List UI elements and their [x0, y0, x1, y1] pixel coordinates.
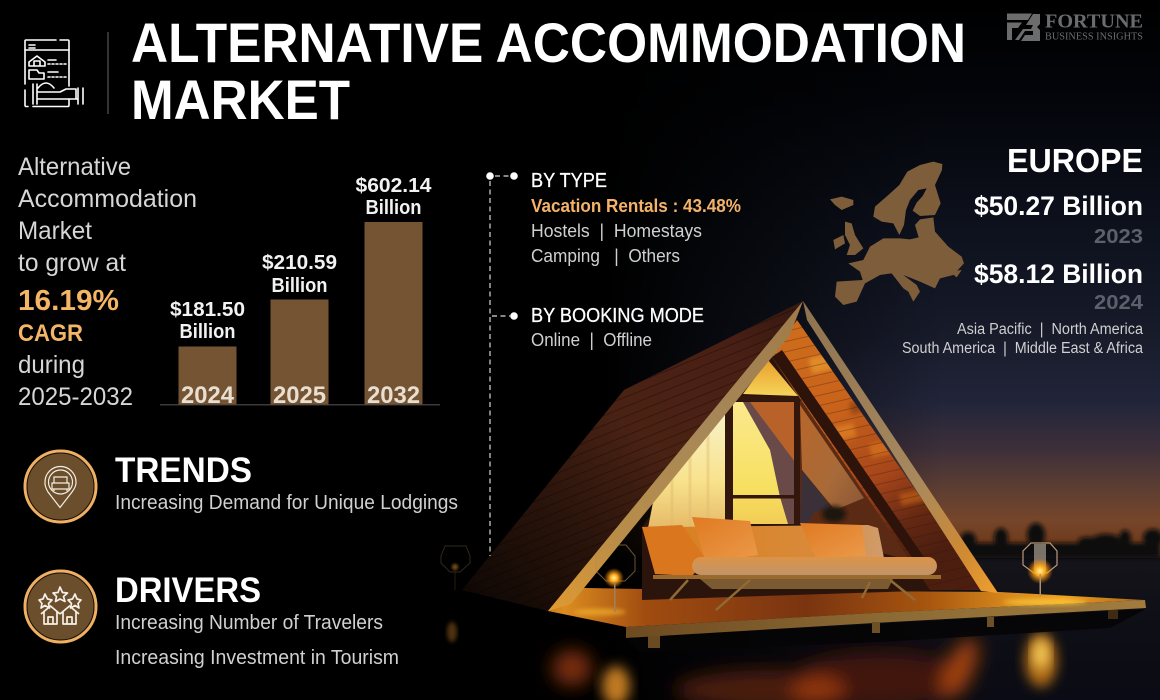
bar 2025: $210.59 [262, 252, 337, 274]
segment: by type: Vacation Rentals : 43.48% [531, 196, 741, 216]
regional data: Europe: 2024 [1094, 292, 1144, 314]
market growth text: Alternative [18, 153, 131, 181]
bar 2032: $602.14 [356, 175, 432, 197]
drivers text: Increasing Number of Travelers [115, 612, 383, 634]
logo: Fortune Business Insights: BUSINESS INSIGHTS [1045, 32, 1143, 42]
roof [462, 301, 803, 611]
sofa [642, 517, 941, 610]
illustration: A-frame cabin on deck [441, 301, 1146, 652]
market growth text: 16.19% [18, 285, 119, 317]
logo: Fortune Business Insights [1007, 10, 1143, 42]
segment: by booking mode [531, 305, 704, 350]
icon: drivers houses and stars [25, 571, 96, 642]
title [131, 11, 966, 131]
drivers text: Increasing Investment in Tourism [115, 647, 399, 669]
segment: by type: Camping | Others [531, 246, 680, 266]
market growth text [18, 153, 197, 411]
regional data: Europe: $50.27 Billion [974, 191, 1143, 221]
title: MARKET [131, 68, 350, 131]
market growth text: 2025-2032 [18, 383, 133, 411]
title: ALTERNATIVE ACCOMMODATION [131, 11, 966, 74]
other regions: Asia Pacific | North America [957, 321, 1143, 338]
map: Europe [830, 162, 964, 305]
bar 2032 [356, 175, 432, 409]
interior glass area [642, 350, 945, 600]
segment: by booking mode: BY BOOKING MODE [531, 305, 704, 327]
trends text: TRENDS [115, 451, 252, 490]
bar 2024: $181.50 [170, 299, 245, 321]
regional data: Europe: EUROPE [1007, 142, 1143, 179]
connector: dashed segmentation line [486, 172, 518, 556]
other regions: South America | Middle East & Africa [902, 340, 1143, 357]
segment: by type: Hostels | Homestays [531, 221, 702, 241]
icon: trends location pin with bed [25, 451, 96, 522]
logo: Fortune Business Insights: FORTUNE [1045, 10, 1143, 32]
bar 2032: Billion [366, 197, 422, 219]
trends text: Increasing Demand for Unique Lodgings [115, 492, 458, 514]
bar 2024 [170, 299, 245, 409]
timber frame [548, 301, 998, 611]
segment: by type [531, 170, 741, 266]
segment: by booking mode: Online | Offline [531, 330, 652, 350]
market growth text: CAGR [18, 320, 83, 347]
regional data: Europe: 2023 [1094, 226, 1143, 248]
lantern: left [596, 545, 635, 612]
bar chart: market size [160, 175, 440, 409]
deck [470, 586, 1146, 652]
bar 2025: 2025 [273, 382, 326, 409]
bar 2025: Billion [272, 275, 328, 297]
bar 2025 [262, 252, 337, 409]
segment: by type: BY TYPE [531, 170, 607, 192]
header divider [108, 32, 109, 114]
bar 2024: Billion [180, 321, 236, 343]
drivers text: DRIVERS [115, 571, 261, 610]
window frame [725, 396, 802, 525]
regional data: Europe: $58.12 Billion [974, 259, 1143, 289]
market growth text: Accommodation [18, 185, 197, 213]
lantern: right [1023, 543, 1057, 597]
lantern: far left [441, 546, 470, 590]
market growth text: to grow at [18, 249, 126, 277]
drivers text [115, 571, 399, 669]
bar 2024: 2024 [181, 382, 235, 409]
header icon: booking page and bed [25, 40, 83, 106]
market growth text: Market [18, 217, 92, 245]
market growth text: during [18, 351, 85, 379]
other regions [902, 321, 1143, 357]
bar 2032: 2032 [367, 382, 420, 409]
regional data: Europe [974, 142, 1144, 314]
orange wood wall [772, 320, 985, 590]
trends text [115, 451, 458, 514]
